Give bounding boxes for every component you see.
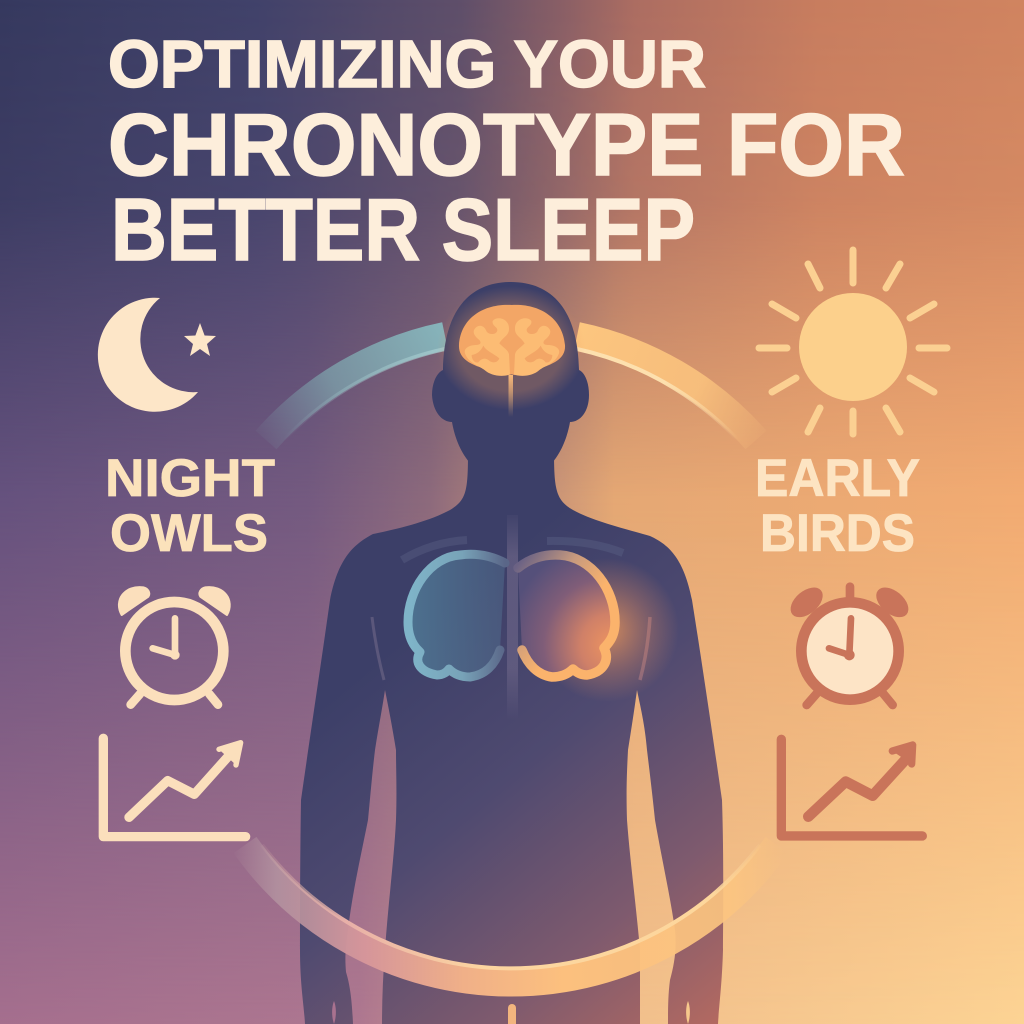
arc: lower sweep around body xyxy=(245,845,777,983)
human silhouette xyxy=(300,282,723,1024)
brain folds xyxy=(472,346,552,363)
label: early birds xyxy=(755,449,920,563)
brain xyxy=(437,286,585,417)
arc: day side, upper right xyxy=(577,336,756,440)
lung: day side, orange with glow xyxy=(518,555,679,702)
chest anatomy lines xyxy=(372,515,650,720)
label: early birds: EARLY xyxy=(755,449,920,508)
torso and arms xyxy=(300,450,723,1024)
icon: night owl rising chart xyxy=(103,738,246,837)
label: night owls xyxy=(105,449,275,563)
icon: crescent moon and star xyxy=(98,298,216,412)
head xyxy=(432,282,589,481)
label: night owls: NIGHT xyxy=(105,449,275,508)
title: OPTIMIZING YOUR xyxy=(108,27,706,102)
icon: early bird alarm clock xyxy=(785,582,914,705)
icon: night owl alarm clock xyxy=(119,587,230,705)
lung: night side, blue xyxy=(408,554,505,677)
label: night owls: OWLS xyxy=(110,504,268,563)
label: early birds: BIRDS xyxy=(760,504,915,563)
finger and leg gaps xyxy=(332,1001,690,1024)
icon: early bird rising chart xyxy=(781,739,922,836)
title: CHRONOTYPE FOR xyxy=(108,95,905,194)
arc: night side, upper left xyxy=(266,336,445,440)
right brain lobes xyxy=(514,318,559,376)
left brain lobes xyxy=(465,318,510,376)
icon: sun xyxy=(759,250,947,434)
title xyxy=(108,27,905,279)
title: BETTER SLEEP xyxy=(111,180,695,279)
